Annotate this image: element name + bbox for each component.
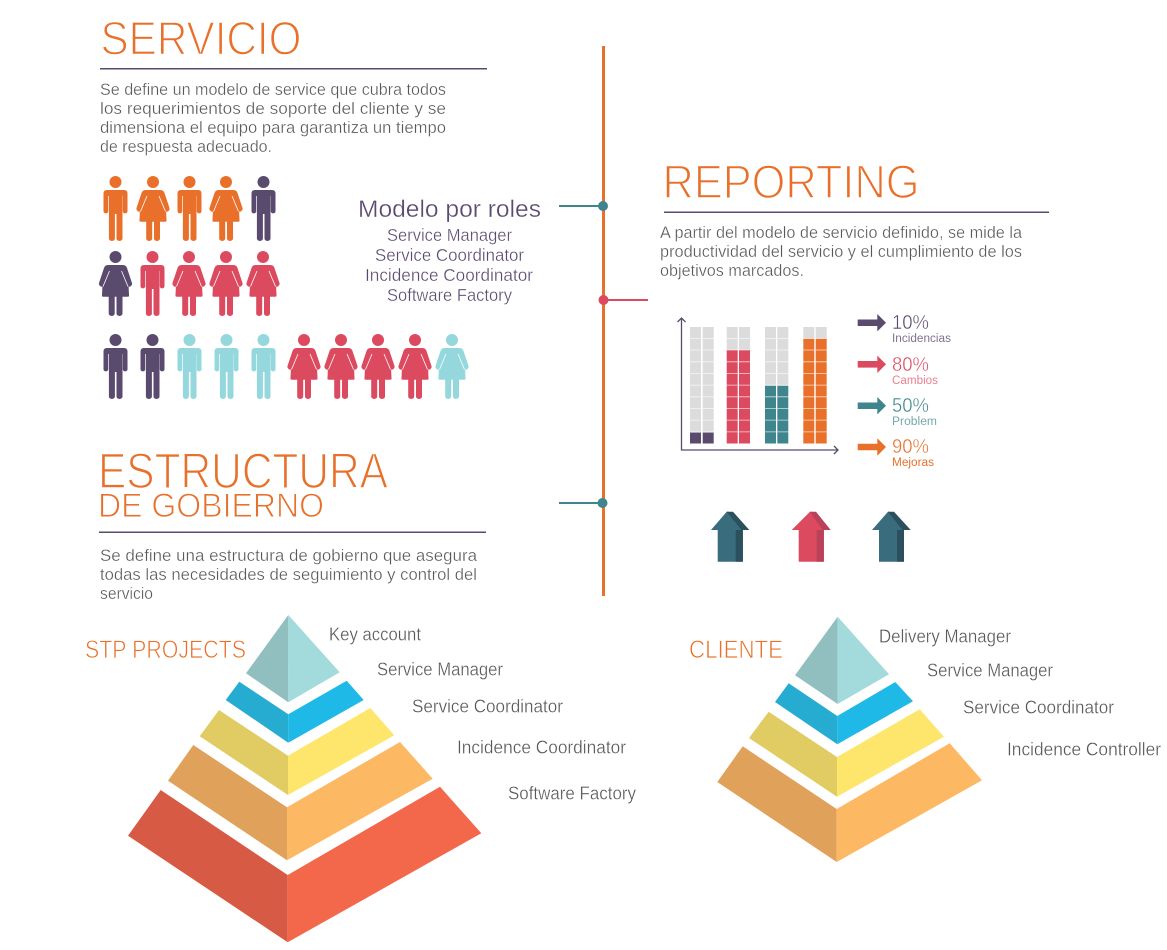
column: mejoras 90% [803, 327, 827, 444]
heading: stp projects: STP PROJECTS [85, 636, 246, 664]
text block: reporting description [660, 224, 1023, 280]
level: incidence coordinator [168, 742, 433, 860]
column: incidencias 10% [690, 327, 714, 444]
labels: stp pyramid roles: Incidence Coordinator [457, 738, 626, 758]
legend: cambios 80% [858, 354, 938, 387]
chart axes [678, 318, 838, 454]
labels: stp pyramid roles: Service Coordinator [412, 697, 563, 717]
column: problem 50% [765, 327, 788, 444]
level: service manager [226, 681, 364, 743]
legend: cambios 80%: 80% [892, 354, 929, 376]
heading: estructura de gobierno: DE GOBIERNO [98, 487, 324, 525]
text block: reporting description: objetivos marcados. [660, 262, 804, 280]
heading: cliente: CLIENTE [689, 636, 783, 664]
level: key account [246, 615, 340, 702]
arrow: teal up 1 [711, 512, 749, 562]
icons: people row 1 [104, 176, 276, 241]
legend: incidencias 10% [858, 312, 951, 345]
level: incidence controller [717, 743, 982, 862]
labels: cliente pyramid roles [879, 626, 1161, 760]
level: service coordinator [749, 709, 944, 797]
legend: mejoras 90% [858, 436, 934, 469]
panel: estructura de gobierno [98, 443, 486, 603]
text block: estructura description: todas las necesidades de seguimiento y control del [100, 566, 477, 584]
legend: mejoras 90%: 90% [892, 436, 929, 458]
text block: servicio description: dimensiona el equipo para garantiza un tiempo [100, 119, 446, 137]
text block: reporting description: productividad del servicio y el cumplimiento de los [660, 243, 1022, 261]
text block: modelo por roles: Software Factory [387, 285, 512, 305]
legend: problem 50% [858, 395, 937, 428]
level: software factory [128, 787, 481, 942]
arrow: red up [792, 512, 831, 562]
level: service manager [775, 682, 913, 744]
text block: modelo por roles: Modelo por roles [358, 196, 541, 223]
level: service coordinator [200, 708, 394, 795]
text block: servicio description: Se define un modelo de service que cubra todos [100, 81, 446, 99]
heading: reporting: REPORTING [662, 156, 920, 209]
labels: cliente pyramid roles: Service Coordinator [963, 698, 1114, 718]
pyramid: stp projects [128, 615, 481, 942]
heading: estructura de gobierno [98, 443, 389, 525]
labels: stp pyramid roles [329, 625, 636, 804]
legend: incidencias 10%: Incidencias [892, 333, 951, 345]
text block: modelo por roles: Service Manager [387, 225, 512, 245]
labels: stp pyramid roles: Software Factory [508, 784, 636, 804]
labels: cliente pyramid roles: Incidence Controller [1007, 740, 1161, 760]
legend: mejoras 90%: Mejoras [892, 457, 934, 469]
labels: stp pyramid roles: Service Manager [377, 660, 503, 680]
text block: estructura description: Se define una estructura de gobierno que asegura [100, 547, 478, 565]
timeline: vertical line with connectors [559, 46, 648, 596]
text block: servicio description: de respuesta adecuado. [100, 138, 272, 156]
legend: problem 50%: 50% [892, 395, 929, 417]
column: cambios 80% [727, 327, 750, 444]
heading: servicio: SERVICIO [100, 12, 302, 66]
text block: modelo por roles [358, 196, 541, 305]
icons: people row 2 [99, 251, 280, 316]
text block: servicio description: los requerimientos de soporte del cliente y se [100, 100, 446, 118]
text block: estructura description [100, 547, 478, 603]
pyramid: cliente [717, 617, 982, 862]
panel: reporting [660, 156, 1049, 280]
text block: servicio description [100, 81, 446, 156]
text block: estructura description: servicio [100, 585, 153, 603]
heading: estructura de gobierno: ESTRUCTURA [98, 443, 389, 499]
legend: cambios 80%: Cambios [892, 375, 938, 387]
text block: modelo por roles: Service Coordinator [375, 245, 524, 265]
text block: reporting description: A partir del modelo de servicio definido, se mide la [660, 224, 1023, 242]
legend: problem 50%: Problem [892, 416, 937, 428]
level: delivery manager [795, 617, 889, 704]
labels: stp pyramid roles: Key account [329, 625, 421, 645]
arrow: teal up 2 [872, 512, 911, 562]
legend: incidencias 10%: 10% [892, 312, 929, 334]
icons: people row 3 [104, 334, 469, 399]
text block: modelo por roles: Incidence Coordinator [365, 265, 533, 285]
panel: servicio [100, 12, 487, 156]
labels: cliente pyramid roles: Service Manager [927, 660, 1053, 680]
labels: cliente pyramid roles: Delivery Manager [879, 626, 1011, 646]
bar chart: cell columns [690, 327, 827, 444]
